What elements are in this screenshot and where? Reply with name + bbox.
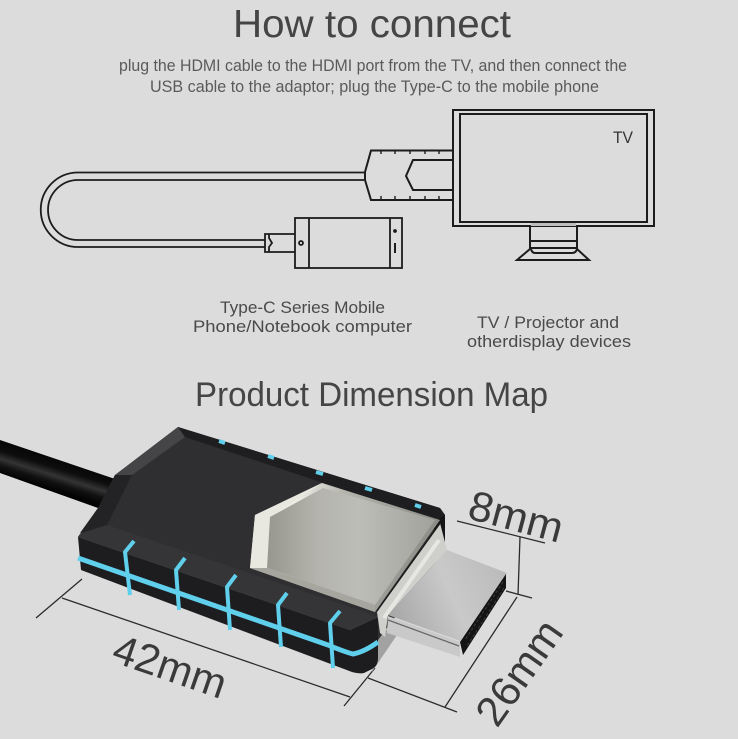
product: HDMI adapter xyxy=(0,427,507,673)
dimension label: 26mm: 26mm xyxy=(466,611,572,734)
dimension label: 8mm: 8mm xyxy=(464,481,569,552)
HDMI plug top face xyxy=(388,550,507,641)
adapter line art xyxy=(365,150,452,200)
HDMI plug opening xyxy=(460,574,506,655)
caption: TV xyxy=(467,313,631,351)
instructions text: plug the HDMI cable to the HDMI port from the TV, and then connect the xyxy=(119,56,627,75)
adapter bevels xyxy=(78,427,445,630)
connection diagram xyxy=(41,110,654,268)
caption: phone: Phone/Notebook computer xyxy=(193,317,412,336)
title: How to connect: How to connect xyxy=(233,3,511,46)
caption: phone: Type-C Series Mobile xyxy=(220,298,385,317)
cable xyxy=(0,440,118,508)
cyan light stripes xyxy=(78,441,421,668)
caption: phone xyxy=(193,298,412,336)
instructions text: USB cable to the adaptor; plug the Type-C to the mobile phone xyxy=(150,77,599,96)
HDMI plug front face xyxy=(387,616,460,657)
cable line art xyxy=(41,172,365,247)
adapter side face xyxy=(78,537,378,673)
caption: TV: otherdisplay devices xyxy=(467,332,631,351)
phone line art xyxy=(265,218,402,268)
TV line art xyxy=(453,110,654,260)
dimension lines xyxy=(36,521,545,712)
metal plate xyxy=(250,483,440,612)
heading: Product Dimension Map: Product Dimension Map xyxy=(195,376,548,414)
shadow under adapter xyxy=(372,625,397,672)
instructions text xyxy=(119,56,627,96)
HDMI plug collar xyxy=(377,523,447,637)
adapter top face xyxy=(78,427,445,640)
TV label: TV xyxy=(613,128,634,147)
caption: TV: TV / Projector and xyxy=(477,313,619,332)
dimension label: 42mm: 42mm xyxy=(107,625,233,708)
